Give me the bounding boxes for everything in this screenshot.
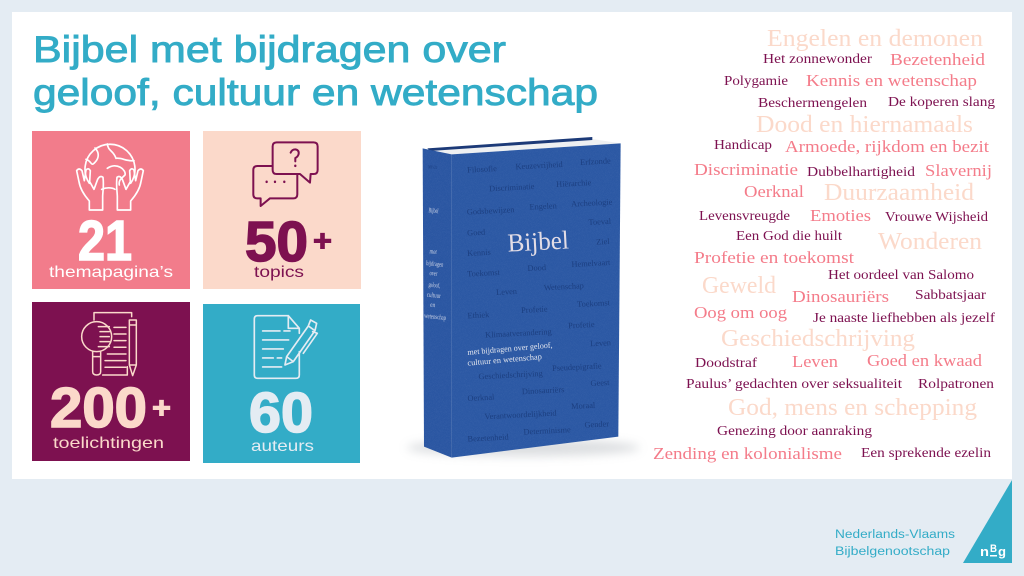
word: Rolpatronen: [918, 376, 994, 391]
cover word pattern: Gender: [584, 419, 609, 430]
cover word pattern: [467, 156, 613, 444]
icon: speech bubbles: [253, 142, 318, 206]
cover word pattern: Toeval: [588, 217, 612, 227]
panel: 50+ topics: [203, 131, 361, 289]
cover word pattern: Engelen: [529, 201, 558, 212]
word: Wonderen: [878, 229, 982, 255]
book spine: [423, 148, 452, 458]
word: Je naaste liefhebben als jezelf: [813, 310, 996, 325]
spine text: cultuur: [426, 291, 442, 300]
spine text: geloof,: [428, 281, 441, 290]
word: Discriminatie: [694, 160, 798, 179]
spine text: over: [429, 269, 438, 278]
word: Goed en kwaad: [867, 351, 983, 370]
panel: 200+ toelichtingen: [32, 302, 190, 461]
word: Beschermengelen: [758, 95, 867, 110]
logo: NBG triangle: n: [980, 544, 989, 559]
logo: NBG triangle: B: [990, 543, 997, 555]
label: toelichtingen: toelichtingen: [53, 435, 164, 452]
cover word pattern: Bezetenheid: [467, 432, 510, 444]
cover word pattern: Pseudepigrafie: [552, 361, 602, 373]
cover word pattern: Oerknal: [467, 393, 495, 403]
cover word pattern: Toekomst: [577, 298, 611, 309]
cover word pattern: Profetie: [568, 320, 595, 330]
cover word pattern: Hemelvaart: [571, 258, 611, 269]
label: themapagina's: themapagina’s: [49, 264, 173, 281]
cover word pattern: Ziel: [596, 237, 610, 247]
word: Levensvreugde: [699, 208, 790, 223]
word: Dinosauriërs: [792, 287, 889, 306]
word: Oog om oog: [694, 303, 788, 322]
word: Doodstraf: [695, 355, 758, 370]
word: Polygamie: [724, 73, 788, 88]
word: De koperen slang: [888, 94, 995, 109]
spine text: met: [429, 247, 437, 256]
cover word pattern: Moraal: [571, 401, 596, 411]
word: Zending en kolonialisme: [653, 444, 842, 463]
spine text: bijdragen: [426, 259, 444, 269]
word: Engelen en demonen: [767, 26, 983, 52]
word: Vrouwe Wijsheid: [885, 209, 988, 224]
panel: 60 auteurs: [203, 304, 360, 463]
word: Het zonnewonder: [763, 51, 873, 66]
white content panel: [12, 12, 1012, 479]
logo text: Nederlands-Vlaams Bijbelgenootschap: Bijbelgenootschap: [835, 546, 950, 558]
cover word pattern: Leven: [496, 287, 518, 297]
cover word pattern: Geest: [590, 378, 610, 388]
cover word pattern: Determinisme: [523, 425, 571, 437]
cover word pattern: Hiërarchie: [556, 178, 592, 189]
cover subtitle: [467, 341, 553, 368]
logo text: Nederlands-Vlaams Bijbelgenootschap: Nederlands-Vlaams: [835, 529, 955, 541]
book front cover: [452, 143, 621, 458]
number: 50+: 50: [245, 210, 308, 274]
cover word pattern: Dood: [527, 263, 547, 273]
label: auteurs: auteurs: [251, 438, 314, 455]
icon: globe in hands: [77, 144, 143, 210]
word: Geschiedschrijving: [721, 326, 915, 352]
cover word pattern: Leven: [590, 338, 612, 348]
label: topics: topics: [254, 264, 304, 281]
cover word pattern: Geschiedschrijving: [478, 369, 543, 381]
word: Handicap: [714, 137, 772, 152]
logo: NBG triangle: [963, 480, 1012, 563]
cover word pattern: Erfzonde: [580, 156, 611, 167]
cover word pattern: Toekomst: [467, 268, 501, 279]
word: Profetie en toekomst: [694, 248, 854, 267]
cover word pattern: Goed: [467, 228, 486, 238]
number: 200+: 200: [50, 376, 147, 440]
word: Duurzaamheid: [824, 180, 974, 206]
book shadow: [407, 439, 640, 456]
word: Emoties: [810, 206, 871, 225]
icon: document and pen: [254, 316, 317, 378]
cover word pattern: Dinosauriërs: [522, 385, 565, 396]
word: Genezing door aanraking: [717, 423, 872, 438]
title: Bijbel met bijdragen over: [33, 29, 506, 70]
number: 200+: +: [152, 392, 171, 425]
icon: magnifier and document: [82, 313, 136, 376]
book pages and top edge: [428, 139, 621, 154]
spine text: [424, 165, 447, 322]
word: Dood en hiernamaals: [756, 112, 973, 138]
cover word pattern: Godsbewijzen: [467, 205, 516, 217]
word: Kennis en wetenschap: [806, 71, 977, 90]
spine text: wetenschap: [424, 312, 447, 322]
cover word pattern: Discriminatie: [489, 182, 535, 193]
spine text: en: [430, 301, 436, 309]
cover word pattern: Ethiek: [467, 310, 490, 320]
cover word pattern: Verantwoordelijkheid: [484, 408, 558, 421]
logo text: Nederlands-Vlaams Bijbelgenootschap: [835, 529, 955, 558]
cover word pattern: Kennis: [467, 248, 491, 258]
book: Bijbel cover: [407, 137, 640, 460]
cover word pattern: Filosofie: [467, 164, 497, 175]
title: [33, 29, 598, 113]
word: Geweld: [702, 273, 776, 299]
word: Dubbelhartigheid: [807, 164, 915, 179]
word cloud: [653, 26, 996, 463]
cover word pattern: Keuzevrijheid: [515, 160, 564, 171]
logo: NBG triangle: g: [998, 544, 1006, 559]
spine text: Bijbel: [428, 206, 439, 215]
word: Bezetenheid: [890, 50, 986, 69]
cover word pattern: Profetie: [521, 305, 548, 315]
panel: 21 themapagina's: [32, 131, 190, 289]
word: Sabbatsjaar: [915, 287, 987, 302]
cover word pattern: Wetenschap: [544, 281, 584, 292]
word: Een God die huilt: [736, 228, 842, 243]
word: Oerknal: [744, 182, 804, 201]
cover grain: [420, 142, 623, 460]
number: 50+: +: [313, 225, 332, 258]
cover title: Bijbel: [507, 225, 570, 258]
word: God, mens en schepping: [728, 395, 977, 421]
cover word pattern: Archeologie: [571, 197, 613, 209]
cover subtitle: met bijdragen over geloof,: [467, 341, 553, 357]
cover subtitle: cultuur en wetenschap: [467, 352, 542, 368]
cover word pattern: Klimaatverandering: [485, 327, 552, 340]
word: Paulus’ gedachten over seksualiteit: [686, 376, 902, 391]
number: 21: 21: [78, 209, 132, 273]
word: Het oordeel van Salomo: [828, 267, 974, 282]
number: 60: 60: [249, 381, 313, 445]
spine text: NBV21: [428, 165, 438, 171]
word: Leven: [792, 352, 839, 371]
title: geloof, cultuur en wetenschap: [33, 72, 598, 113]
word: Een sprekende ezelin: [861, 445, 991, 460]
word: Armoede, rijkdom en bezit: [785, 137, 989, 156]
word: Slavernij: [925, 161, 992, 180]
